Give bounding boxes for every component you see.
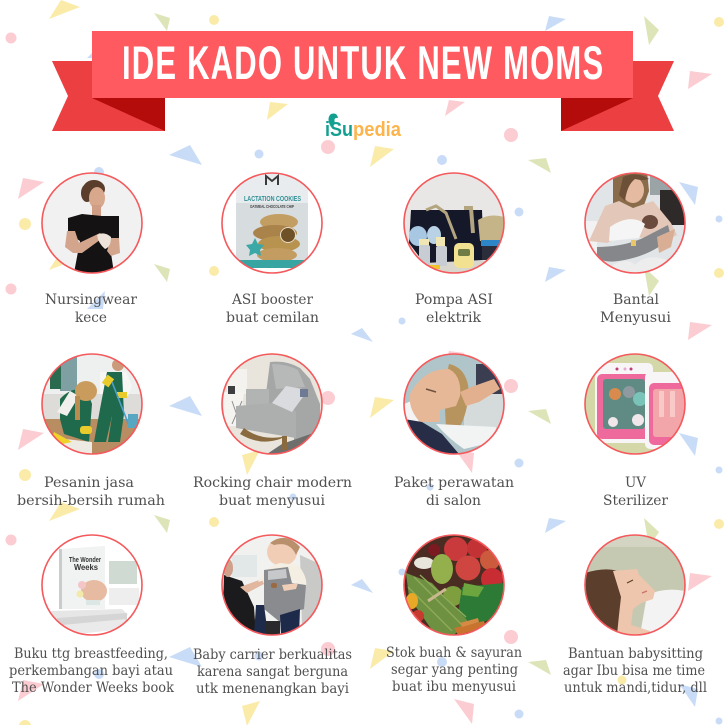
photo: pink UV sterilizers [585,354,687,454]
caption: Bantal [613,292,660,308]
caption: kece [75,310,107,326]
item 6: rocking chair [193,354,352,509]
caption: utk menenangkan bayi [196,681,349,697]
caption: segar yang penting [391,662,518,678]
caption: Pompa ASI [415,292,493,308]
photo: cleaning workers [42,354,142,454]
photo: breast pump and bag [404,173,504,273]
caption: elektrik [426,310,482,326]
photo: woman relaxing in bath [585,535,685,635]
photo: lactation cookies bag [222,171,322,273]
title: IDE KADO UNTUK NEW MOMS [122,38,603,90]
caption: Menyusui [600,310,672,326]
photo: fruit and vegetable pile [404,535,504,635]
caption: Rocking chair modern [193,475,352,491]
item 10: baby carrier [193,535,352,697]
caption: UV [625,475,647,491]
photo: The Wonder Weeks book: Weeks [74,563,99,572]
caption: bersih-bersih rumah [17,493,165,509]
photo: woman in black dress [42,173,142,273]
item 3: pompa ASI [404,173,504,326]
item 5: jasa bersih-bersih [17,354,165,509]
item 12: babysitting [563,535,707,696]
caption: perkembangan bayi atau [9,663,173,679]
caption: Stok buah & sayuran [386,645,522,661]
caption: buat menyusui [219,493,326,509]
caption: ASI booster [231,292,313,308]
item 9: books [9,535,174,696]
photo: baby in carrier [222,535,322,635]
logo: iSupedia: pedia [353,119,402,141]
photo: mother with nursing pillow [585,171,685,275]
photo: lactation cookies bag: OATMEAL CHOCOLATE CHIP [250,204,294,209]
caption: agar Ibu bisa me time [563,663,705,679]
photo: The Wonder Weeks book [42,535,142,635]
caption: Pesanin jasa [44,475,134,491]
item 7: salon [394,354,514,509]
banner right tail [561,61,674,131]
photo: grey rocking chair [222,354,322,454]
photo: The Wonder Weeks book: The Wonder [69,555,101,564]
photo: lactation cookies bag: LACTATION COOKIES [244,196,301,203]
photo: hair wash at salon [404,354,504,454]
item 2: ASI booster [222,171,322,326]
banner right fold [561,98,633,131]
caption: The Wonder Weeks book [12,680,174,696]
caption: Buku ttg breastfeeding, [14,646,168,662]
caption: Paket perawatan [394,475,514,491]
caption: di salon [426,493,481,509]
banner left tail [52,61,165,131]
title banner [52,31,674,131]
item 4: bantal menyusui [585,171,685,326]
logo: iSupedia: iSu [325,119,353,141]
caption: Sterilizer [603,493,668,509]
logo: iSupedia [325,114,402,141]
banner left fold [92,98,165,131]
caption: untuk mandi,tidur, dll [564,680,707,696]
caption: buat ibu menyusui [392,679,516,695]
caption: buat cemilan [226,310,319,326]
caption: Bantuan babysitting [568,646,703,662]
item 1: nursingwear [42,173,142,326]
caption: Baby carrier berkualitas [193,647,352,663]
item 8: UV sterilizer [585,354,687,509]
banner main [92,31,633,98]
caption: Nursingwear [45,292,137,308]
item 11: fruits and vegetables [386,535,522,695]
caption: karena sangat berguna [197,664,348,680]
